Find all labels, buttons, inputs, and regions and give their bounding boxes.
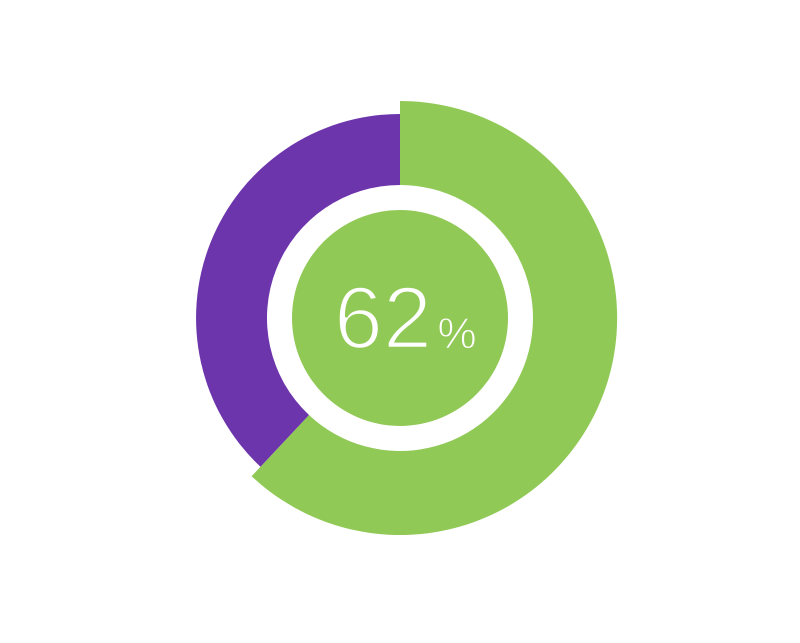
- label: 62%: [334, 268, 477, 367]
- segment: green 62%: [252, 101, 617, 535]
- label: 62%: %: [437, 309, 477, 358]
- center circle: [292, 210, 508, 426]
- label: 62%: 62: [334, 268, 432, 367]
- segment: purple 38%: [196, 114, 400, 467]
